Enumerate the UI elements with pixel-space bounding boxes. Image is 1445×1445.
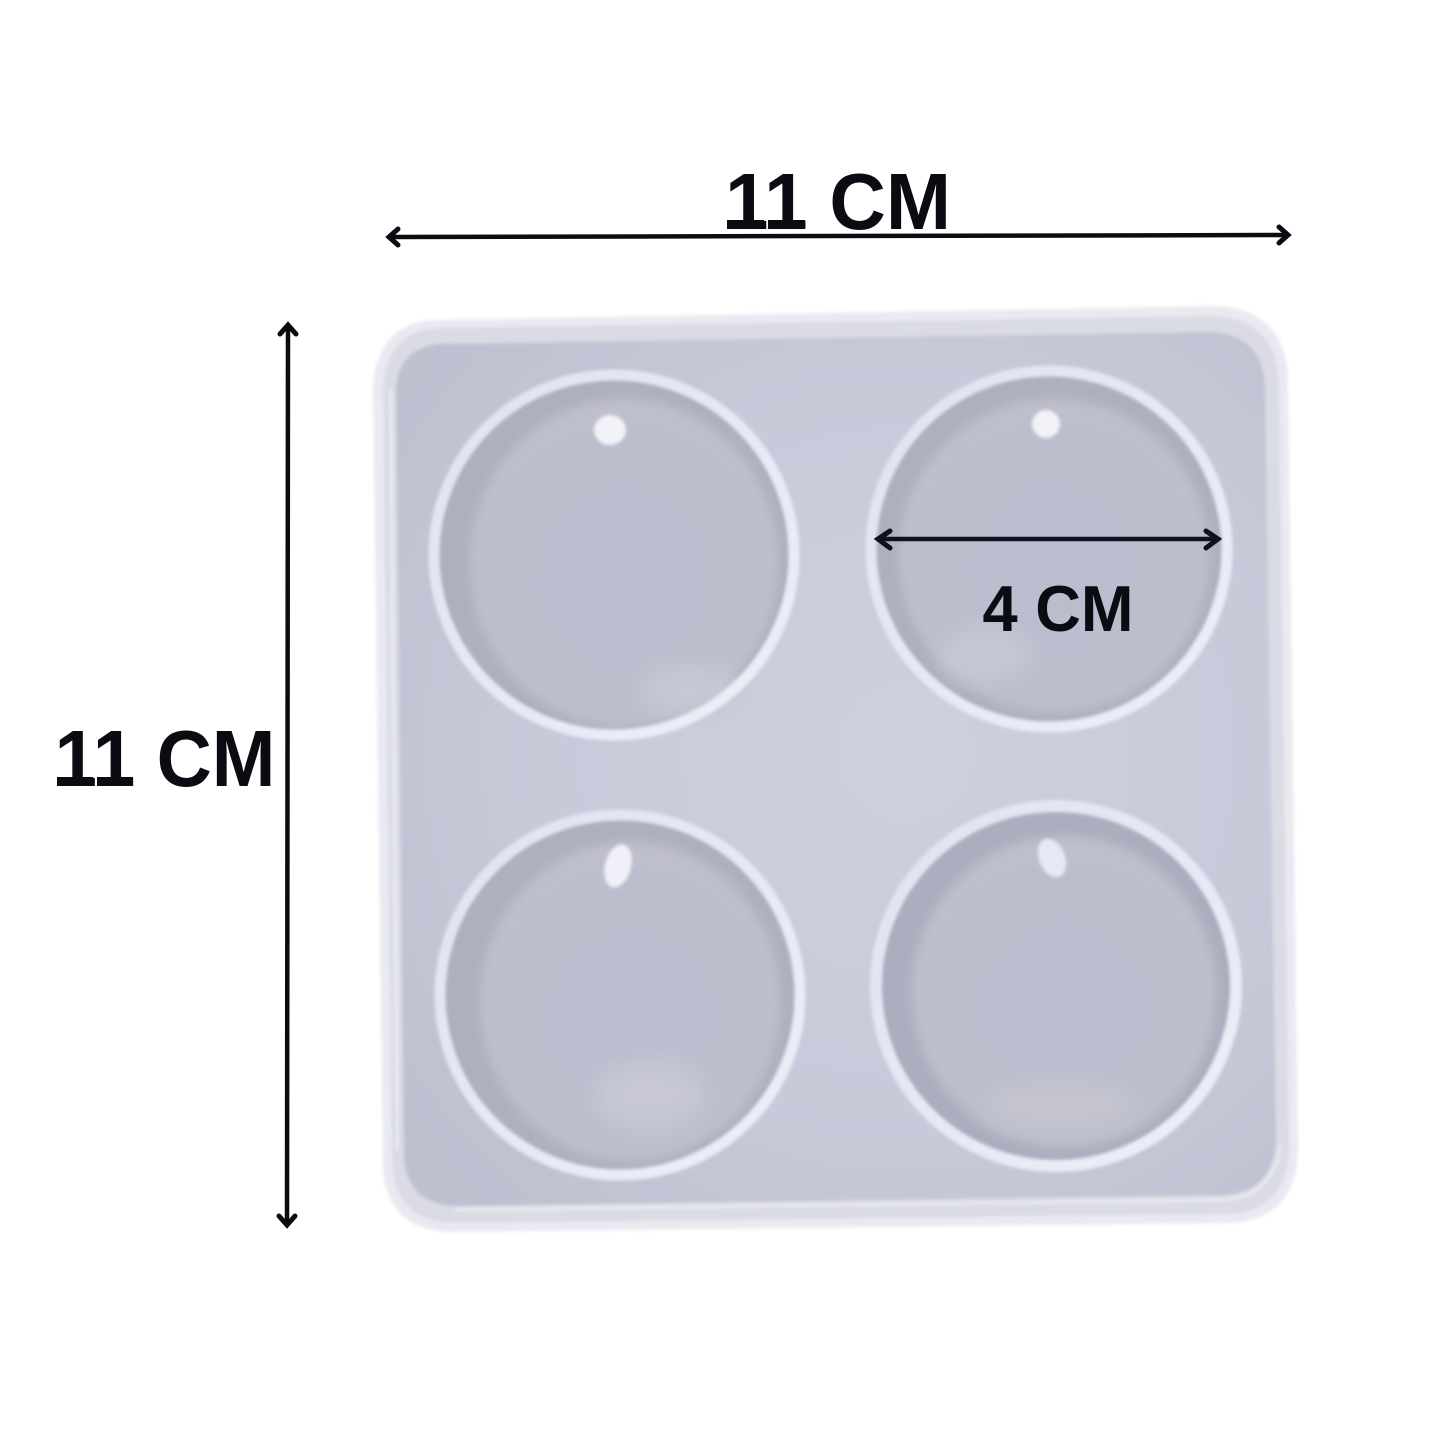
- arrow: left height: [279, 325, 296, 1225]
- arrow: top width: [389, 227, 1288, 245]
- label: top 11 CM: 11 CM: [725, 157, 951, 246]
- cavity: top left: [434, 375, 794, 735]
- mould tray: [373, 306, 1298, 1232]
- label: 4 CM: 4 CM: [982, 572, 1134, 645]
- cavity: bottom left: [440, 815, 800, 1175]
- cavity: top right: [871, 371, 1227, 727]
- label: left 11 CM: 11 CM: [54, 714, 276, 803]
- arrow: cavity diameter: [878, 531, 1218, 548]
- cavity: bottom right: [876, 806, 1236, 1166]
